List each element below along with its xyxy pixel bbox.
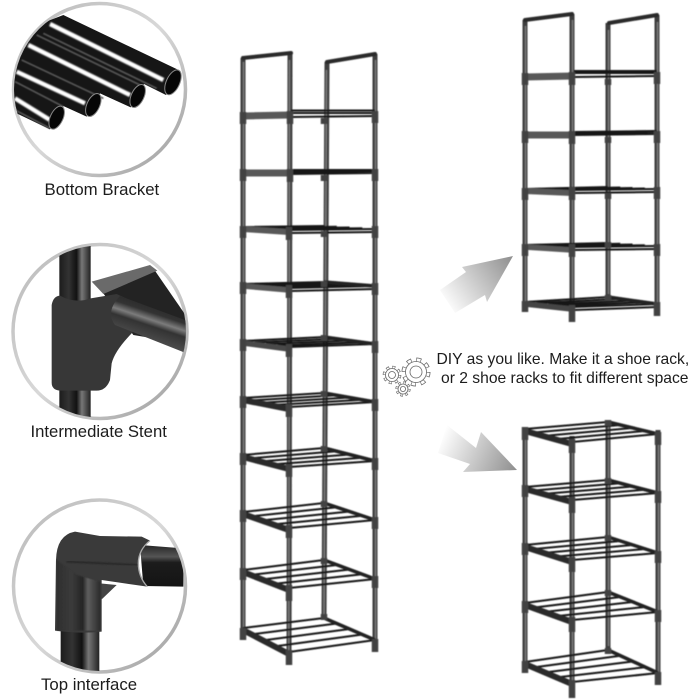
rack posts and handles — [243, 53, 376, 665]
shelf 2 — [525, 478, 658, 513]
shelf 4 — [243, 281, 375, 298]
detail circle: black steel tubes — [7, 4, 186, 176]
rack posts and handles — [525, 14, 658, 322]
shelf 4 — [525, 242, 657, 257]
shelf 1 — [525, 420, 658, 453]
shelf 6 — [243, 391, 375, 417]
rack posts — [525, 422, 658, 698]
shelf 2 — [243, 169, 375, 182]
label: Top interface: Top interface — [41, 675, 137, 694]
shelf 3 — [525, 535, 658, 572]
shelf 3 — [525, 187, 657, 200]
icon: gears — [384, 360, 428, 395]
shelf 3 — [243, 226, 375, 240]
panel: bottom bracket detail — [7, 4, 186, 199]
shelf 5 — [525, 648, 658, 698]
shelf 10 — [243, 614, 375, 665]
tall ten-tier shoe rack — [243, 53, 376, 665]
small gear — [397, 383, 409, 395]
detail circle: bracket joint — [13, 243, 187, 420]
panel: intermediate stent detail — [13, 243, 187, 441]
arrow: to lower rack — [438, 425, 517, 472]
text block: DIY description — [436, 351, 689, 387]
big gear — [404, 360, 428, 384]
shelf 1 — [243, 110, 375, 124]
shelf 7 — [243, 446, 375, 477]
shelf 5 — [243, 335, 375, 357]
upper right five-tier rack with handles — [525, 14, 658, 322]
shelf 4 — [525, 590, 658, 632]
medium gear — [384, 368, 400, 382]
label: Bottom Bracket: Bottom Bracket — [44, 180, 160, 199]
shelf 2 — [525, 131, 657, 144]
arrow: to upper rack — [440, 256, 513, 313]
shelf 8 — [243, 501, 375, 538]
text block: DIY description: DIY as you like. Make it a shoe rack, — [436, 351, 689, 368]
shelf 5 — [525, 295, 657, 322]
label: Intermediate Stent: Intermediate Stent — [30, 422, 167, 441]
shelf 1 — [525, 71, 657, 85]
text block: DIY description: or 2 shoe racks to fit different space — [441, 370, 688, 387]
detail circle: elbow connector — [14, 500, 186, 672]
panel: top interface detail — [14, 500, 186, 694]
lower right five-tier rack — [525, 420, 658, 698]
shelf 9 — [243, 558, 375, 601]
